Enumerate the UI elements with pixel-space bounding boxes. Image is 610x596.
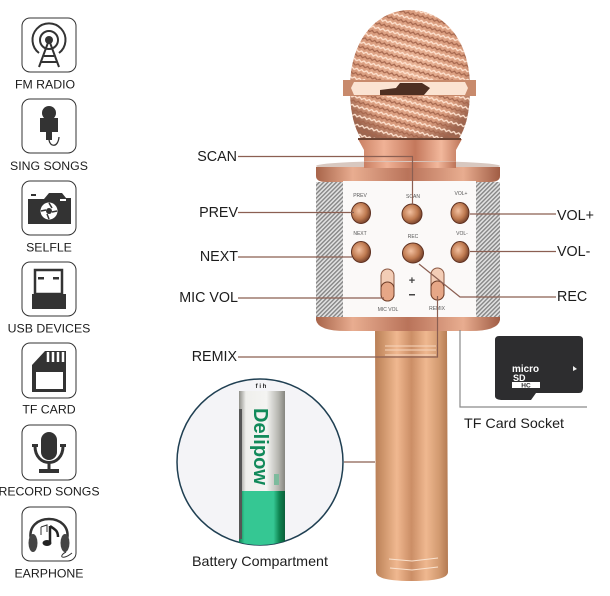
bottom collar: [316, 317, 500, 331]
head ring: [343, 80, 476, 96]
button captions: [353, 191, 468, 313]
microSD card: SD: [513, 373, 526, 383]
button captions: PREV: [353, 193, 367, 199]
icon: sing songs: [22, 99, 76, 153]
icon: earphone: [22, 507, 76, 561]
right callout labels: [557, 208, 594, 305]
right callout labels: VOL-: [557, 244, 591, 260]
icon: TF card: [22, 343, 76, 398]
left callout labels: SCAN: [197, 149, 237, 165]
label: TF CARD: TF CARD: [22, 402, 76, 416]
button captions: VOL+: [455, 191, 468, 197]
button captions: MIC VOL: [378, 307, 398, 313]
handle: [375, 330, 448, 581]
battery circle: [177, 379, 343, 551]
callout lines: [238, 156, 587, 462]
left callout labels: REMIX: [192, 349, 237, 365]
left callout labels: MIC VOL: [179, 290, 238, 306]
icon: record songs: [22, 425, 76, 480]
label: SELFLE: SELFLE: [26, 240, 72, 254]
button captions: NEXT: [353, 231, 367, 237]
control panel: [343, 181, 476, 320]
label: RECORD SONGS: RECORD SONGS: [0, 484, 100, 498]
left callout labels: NEXT: [200, 249, 238, 265]
top collar: [316, 161, 500, 182]
icon: USB device: [22, 262, 76, 316]
button captions: VOL-: [456, 231, 468, 237]
battery circle: Delipow: [249, 408, 271, 485]
label: USB DEVICES: USB DEVICES: [8, 322, 90, 336]
icon: selfie camera: [22, 181, 76, 235]
microphone: [316, 10, 500, 581]
sliders: [381, 268, 444, 301]
speaker grilles: [316, 182, 500, 318]
sliders: +: [409, 275, 415, 287]
button captions: REMIX: [429, 306, 446, 312]
microSD card: [495, 336, 583, 400]
left callout labels: PREV: [199, 205, 238, 221]
left callout labels: [179, 149, 238, 365]
right callout labels: VOL+: [557, 208, 594, 224]
icon column: [0, 18, 100, 580]
button captions: SCAN: [406, 194, 420, 200]
label: TF Card Socket: TF Card Socket: [464, 415, 564, 431]
microSD card: HC: [521, 382, 531, 390]
label: FM RADIO: FM RADIO: [15, 78, 75, 92]
buttons: [352, 202, 469, 263]
button captions: REC: [408, 234, 419, 240]
right callout labels: REC: [557, 289, 587, 305]
label: Battery Compartment: Battery Compartment: [192, 553, 328, 569]
mesh head: [350, 10, 470, 140]
battery circle: f i h: [256, 384, 267, 390]
label: SING SONGS: SING SONGS: [10, 159, 88, 173]
microSD card: micro: [512, 364, 539, 375]
neck: [358, 139, 462, 167]
icon: FM radio: [22, 18, 76, 72]
label: EARPHONE: EARPHONE: [14, 566, 84, 580]
